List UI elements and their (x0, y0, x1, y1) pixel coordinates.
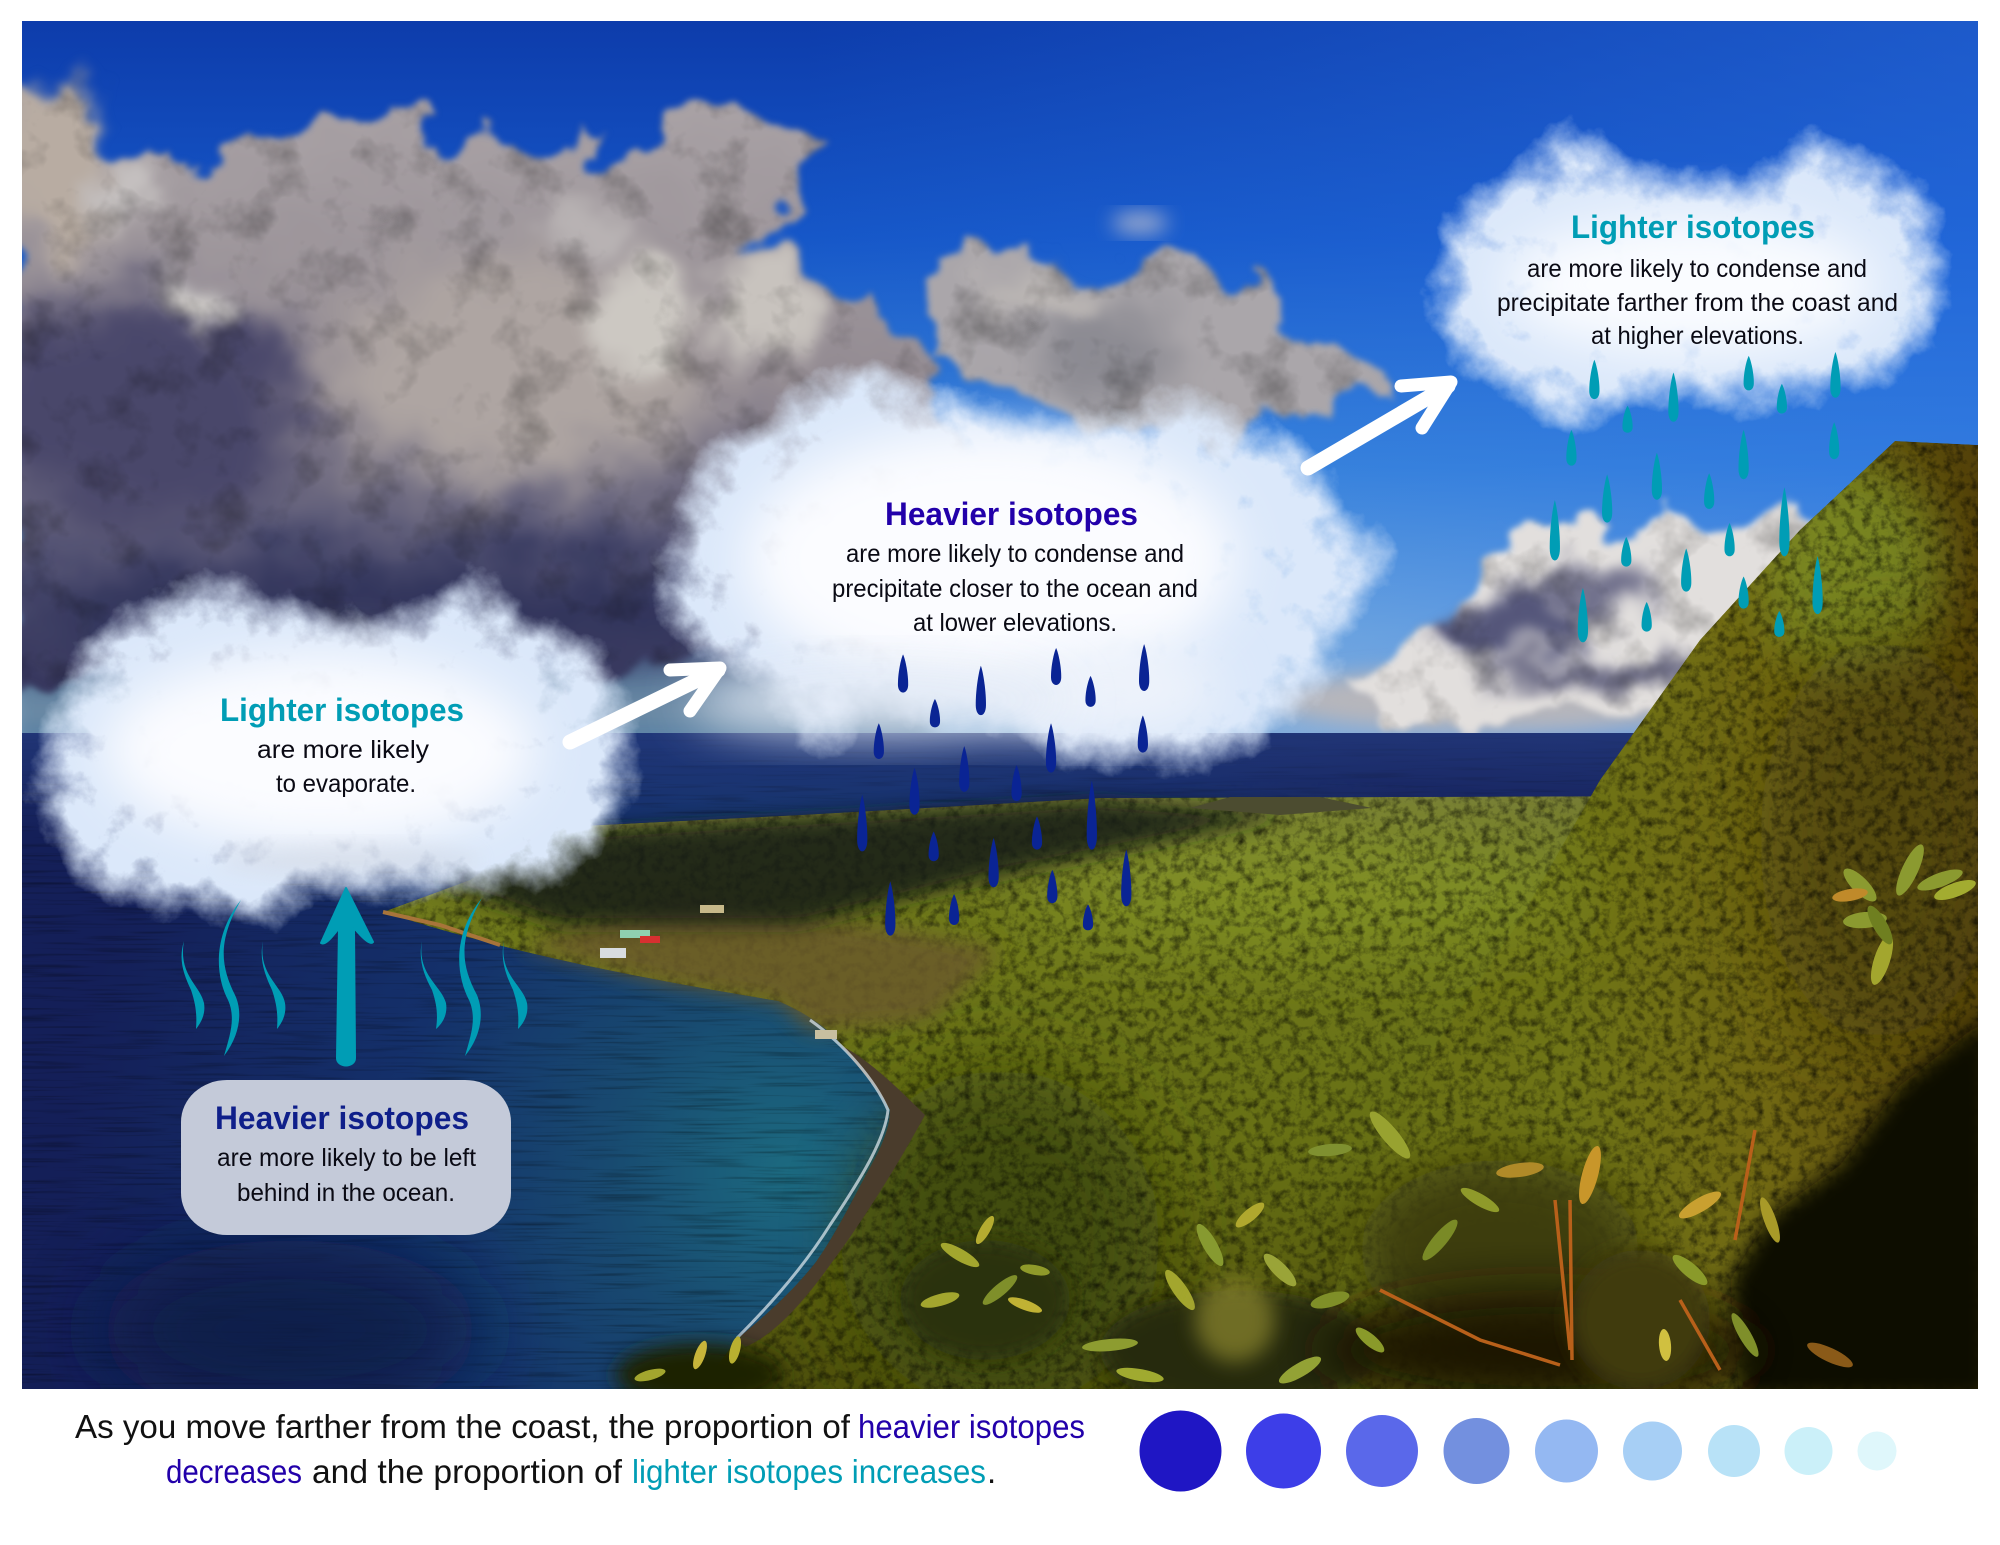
evaporation waves (182, 898, 527, 1056)
village flats (520, 900, 1000, 1030)
text: heavier isotopes condense closer: are more likely to condense and (846, 540, 1184, 568)
text: heavier isotopes condense closer: at lower elevations. (913, 609, 1117, 637)
text: lighter isotopes evaporate (220, 692, 464, 798)
text: lighter isotopes condense farther: are more likely to condense and (1527, 255, 1867, 283)
small wisp in the sky (1112, 212, 1168, 234)
caption: decreases (166, 1453, 302, 1490)
callout: heavier isotopes left behind: behind in the ocean. (237, 1179, 455, 1207)
arrow: from left cloud to centre cloud (570, 668, 720, 742)
shoreline sand near the village (383, 912, 500, 945)
rain drops: lighter isotopes (1550, 352, 1841, 642)
caption: . (987, 1453, 996, 1490)
caption: lighter isotopes increases (632, 1453, 986, 1490)
leafy branch at top right (1831, 841, 1978, 987)
text: lighter isotopes condense farther: at higher elevations. (1591, 322, 1804, 350)
surf line (737, 1020, 888, 1338)
text: lighter isotopes evaporate: to evaporate. (276, 770, 416, 798)
beach (737, 1046, 925, 1347)
caption: As you move farther from the coast, the proportion of (75, 1408, 851, 1445)
lighter distant water (22, 733, 1682, 833)
near and distant ocean (22, 733, 1682, 1393)
sky (22, 21, 1978, 741)
arrow: from centre cloud to right cloud (1308, 382, 1451, 468)
callout: heavier isotopes left behind (181, 1080, 511, 1235)
caption: and the proportion of (312, 1453, 623, 1490)
dark coastal scrub (840, 1070, 1160, 1410)
text: heavier isotopes condense closer: precipitate closer to the ocean and (832, 575, 1198, 603)
text: heavier isotopes condense closer: Heavier isotopes (885, 496, 1138, 532)
foreground leaves (633, 1107, 1856, 1388)
orange shrub stems (1380, 1130, 1755, 1370)
mountain ridge (1300, 441, 1978, 1389)
white cloud, right (1425, 115, 1965, 432)
arrow: evaporation upward (321, 888, 373, 1066)
shadow at lower right (1730, 1015, 1990, 1400)
low cloud layer above the horizon (1270, 668, 1730, 732)
callout: heavier isotopes left behind: are more likely to be left (217, 1144, 476, 1172)
green upper slope (1760, 460, 1940, 680)
white cloud, left (30, 555, 650, 920)
mesa on the horizon (1190, 797, 1372, 815)
text: heavier isotopes condense closer (832, 496, 1198, 637)
grey storm cloud, left (0, 80, 950, 690)
dark upper right trees (1760, 640, 2000, 1040)
text: lighter isotopes evaporate: Lighter isotopes (220, 692, 464, 728)
land and hillside (383, 441, 2000, 1410)
legend: circles fading from heavier to lighter (1140, 1410, 1896, 1492)
text: lighter isotopes condense farther: Lighter isotopes (1571, 209, 1815, 245)
horizon haze band on the left (22, 644, 936, 733)
dark water, lower left (100, 1240, 480, 1420)
village buildings (600, 905, 837, 1039)
text: lighter isotopes evaporate: are more likely (257, 736, 430, 764)
caption: heavier isotopes (858, 1408, 1085, 1445)
white cloud, centre (660, 355, 1405, 765)
text: lighter isotopes condense farther (1497, 209, 1898, 350)
rain drops: heavier isotopes (857, 644, 1149, 936)
callout: heavier isotopes left behind: Heavier isotopes (215, 1100, 469, 1136)
text: lighter isotopes condense farther: precipitate farther from the coast and (1497, 289, 1898, 317)
cumulus cloud bank behind the ridge (1330, 490, 1880, 725)
caption (75, 1408, 1085, 1490)
foreground shrubs (615, 1160, 1760, 1410)
grey cloud, centre (920, 240, 1385, 450)
shaded valley floor (430, 800, 1290, 925)
lit foothills (1020, 830, 1580, 950)
